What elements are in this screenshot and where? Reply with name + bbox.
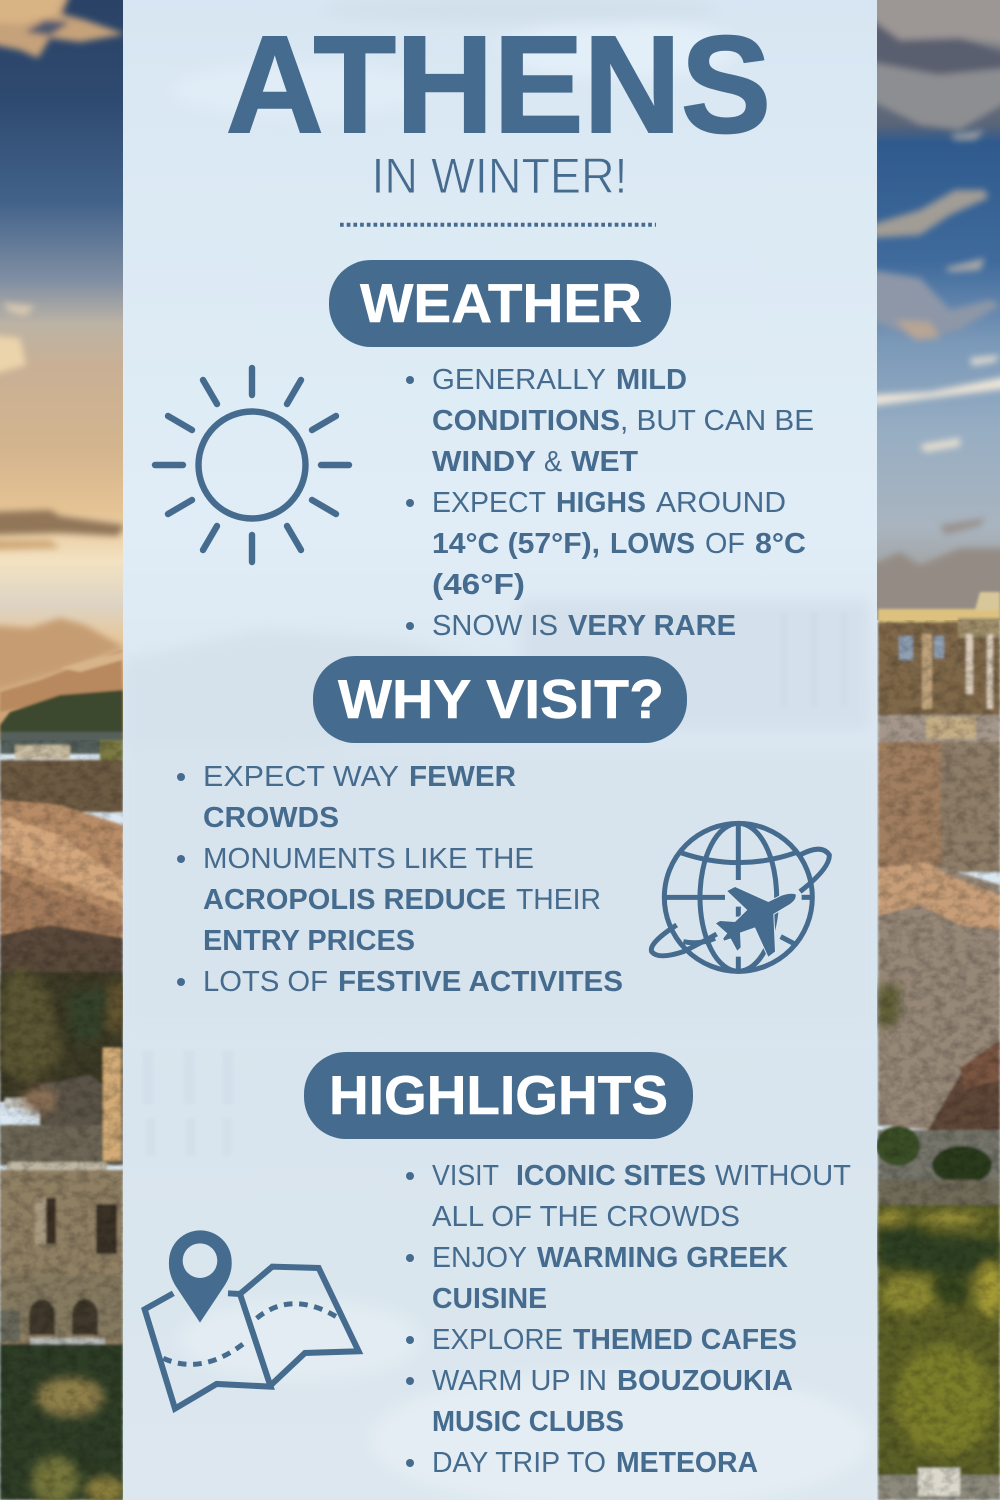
why visit bullet list: LOTS OF xyxy=(203,966,328,998)
why visit bullet list: FEWER xyxy=(409,761,516,793)
heading pill: weather xyxy=(329,260,671,347)
why visit bullet list: THEIR xyxy=(516,884,601,916)
highlights bullet list: ALL OF THE CROWDS xyxy=(432,1201,740,1233)
highlights bullet list: MUSIC CLUBS xyxy=(432,1406,624,1438)
weather bullet list: OF xyxy=(705,528,745,560)
weather bullet list: VERY RARE xyxy=(568,610,736,642)
weather bullet list: EXPECT xyxy=(432,487,546,519)
background photo: right strip xyxy=(870,0,1000,1500)
weather bullet list: WINDY xyxy=(432,446,536,478)
highlights bullet list: ICONIC SITES xyxy=(516,1160,706,1192)
heading pill: why visit xyxy=(313,656,687,743)
highlights bullet list: BOUZOUKIA xyxy=(617,1365,793,1397)
title: ATHENS xyxy=(226,8,771,162)
highlights bullet list: VISIT xyxy=(432,1160,499,1192)
weather bullet list: (46°F) xyxy=(432,569,525,601)
title: IN WINTER! xyxy=(372,148,628,204)
icon: sun xyxy=(155,368,349,562)
weather bullet list: AROUND xyxy=(656,487,786,519)
heading pill: highlights: HIGHLIGHTS xyxy=(329,1064,668,1126)
weather bullet list: LOWS xyxy=(610,528,695,560)
background photo: left strip xyxy=(0,0,125,1500)
weather bullet list: MILD xyxy=(616,364,687,396)
why visit bullet list: MONUMENTS LIKE THE xyxy=(203,843,534,875)
weather bullet list: HIGHS xyxy=(556,487,646,519)
highlights bullet list: DAY TRIP TO xyxy=(432,1447,606,1479)
highlights bullet list: EXPLORE xyxy=(432,1324,563,1356)
highlights bullet list: CUISINE xyxy=(432,1283,547,1315)
highlights bullet list: WARMING GREEK xyxy=(537,1242,788,1274)
why visit bullet list: FESTIVE ACTIVITES xyxy=(338,966,623,998)
why visit bullet list: EXPECT WAY xyxy=(203,761,399,793)
weather bullet list: CONDITIONS xyxy=(432,405,620,437)
why visit bullet list: ACROPOLIS REDUCE xyxy=(203,884,506,916)
why visit bullet list: CROWDS xyxy=(203,802,339,834)
weather bullet list: 14°C (57°F), xyxy=(432,528,600,560)
heading pill: why visit: WHY VISIT? xyxy=(338,668,664,730)
why visit bullet list: ENTRY PRICES xyxy=(203,925,415,957)
weather bullet list: 8°C xyxy=(755,528,806,560)
highlights bullet list: WITHOUT xyxy=(715,1160,851,1192)
highlights bullet list: WARM UP IN xyxy=(432,1365,607,1397)
highlights bullet list: ENJOY xyxy=(432,1242,527,1274)
highlights bullet list: METEORA xyxy=(616,1447,758,1479)
why visit bullet list xyxy=(177,761,623,998)
icon: globe with plane xyxy=(651,823,829,971)
heading pill: weather: WEATHER xyxy=(360,272,642,334)
weather bullet list: SNOW IS xyxy=(432,610,558,642)
highlights bullet list: THEMED CAFES xyxy=(573,1324,797,1356)
icon: map with location pin xyxy=(145,1230,359,1409)
highlights bullet list xyxy=(406,1160,851,1479)
heading pill: highlights xyxy=(304,1052,693,1139)
translucent center panel xyxy=(368,2,861,1500)
weather bullet list: & xyxy=(544,446,562,478)
weather bullet list: GENERALLY xyxy=(432,364,606,396)
weather bullet list: , BUT CAN BE xyxy=(620,405,814,437)
weather bullet list: WET xyxy=(571,446,638,478)
weather bullet list xyxy=(406,364,814,642)
